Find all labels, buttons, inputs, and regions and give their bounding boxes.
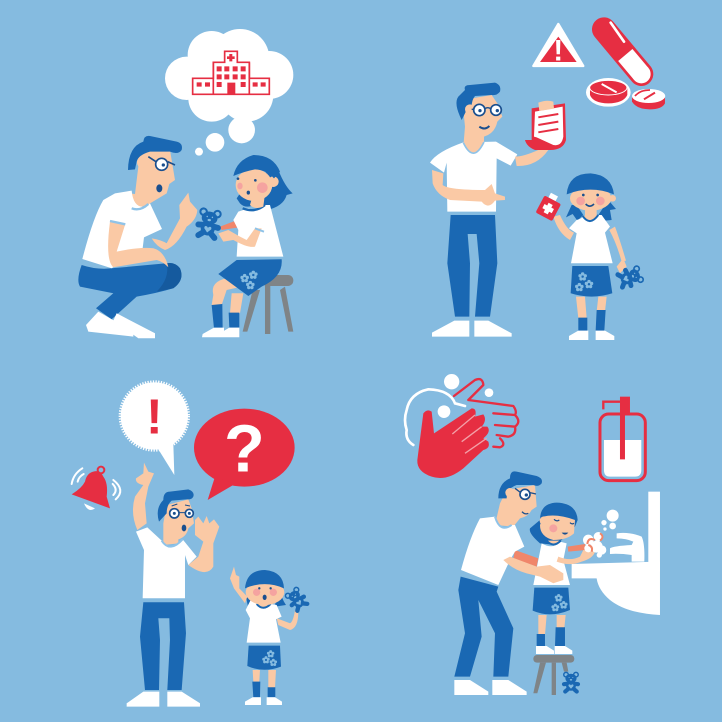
icon: washing hands bbox=[405, 374, 518, 478]
icon: soap dispenser bbox=[600, 397, 645, 481]
panel: alert signs bbox=[72, 382, 308, 707]
icon: tablets bbox=[586, 78, 665, 109]
sink and faucet bbox=[572, 492, 660, 615]
icon: bell bbox=[72, 467, 120, 510]
panel: medicine advice bbox=[430, 23, 665, 340]
man standing bbox=[430, 83, 548, 337]
girl seated bbox=[202, 155, 293, 337]
panel: hospital conversation bbox=[78, 29, 293, 338]
girl raising finger bbox=[230, 567, 298, 705]
icon: warning triangle: ! bbox=[553, 34, 563, 67]
icon: capsule bbox=[604, 23, 651, 83]
girl washing hands bbox=[530, 503, 595, 654]
icon: medicine bottle bbox=[536, 191, 564, 221]
man crouching bbox=[78, 136, 197, 338]
man raising finger bbox=[127, 463, 219, 707]
soap foam and bubbles bbox=[583, 510, 619, 558]
stool bbox=[243, 275, 293, 334]
girl with bottle bbox=[553, 173, 627, 340]
teddy bear bbox=[285, 586, 308, 612]
speech bubble: exclamation bbox=[120, 382, 189, 475]
man's front arm bbox=[503, 557, 563, 583]
icon: warning triangle bbox=[533, 24, 583, 67]
stool bbox=[533, 655, 574, 695]
panel: handwashing bbox=[405, 374, 660, 695]
teddy bear bbox=[196, 208, 221, 238]
icon: hospital bbox=[193, 51, 269, 94]
man helping bbox=[454, 471, 542, 695]
teddy bear bbox=[617, 265, 644, 289]
teddy bear bbox=[564, 672, 578, 692]
icon: prescription clipboard bbox=[525, 101, 566, 150]
thought bubble bbox=[165, 29, 293, 156]
speech bubble: exclamation: ! bbox=[146, 389, 163, 444]
speech bubble: question bbox=[194, 409, 295, 500]
speech bubble: question: ? bbox=[224, 413, 265, 487]
